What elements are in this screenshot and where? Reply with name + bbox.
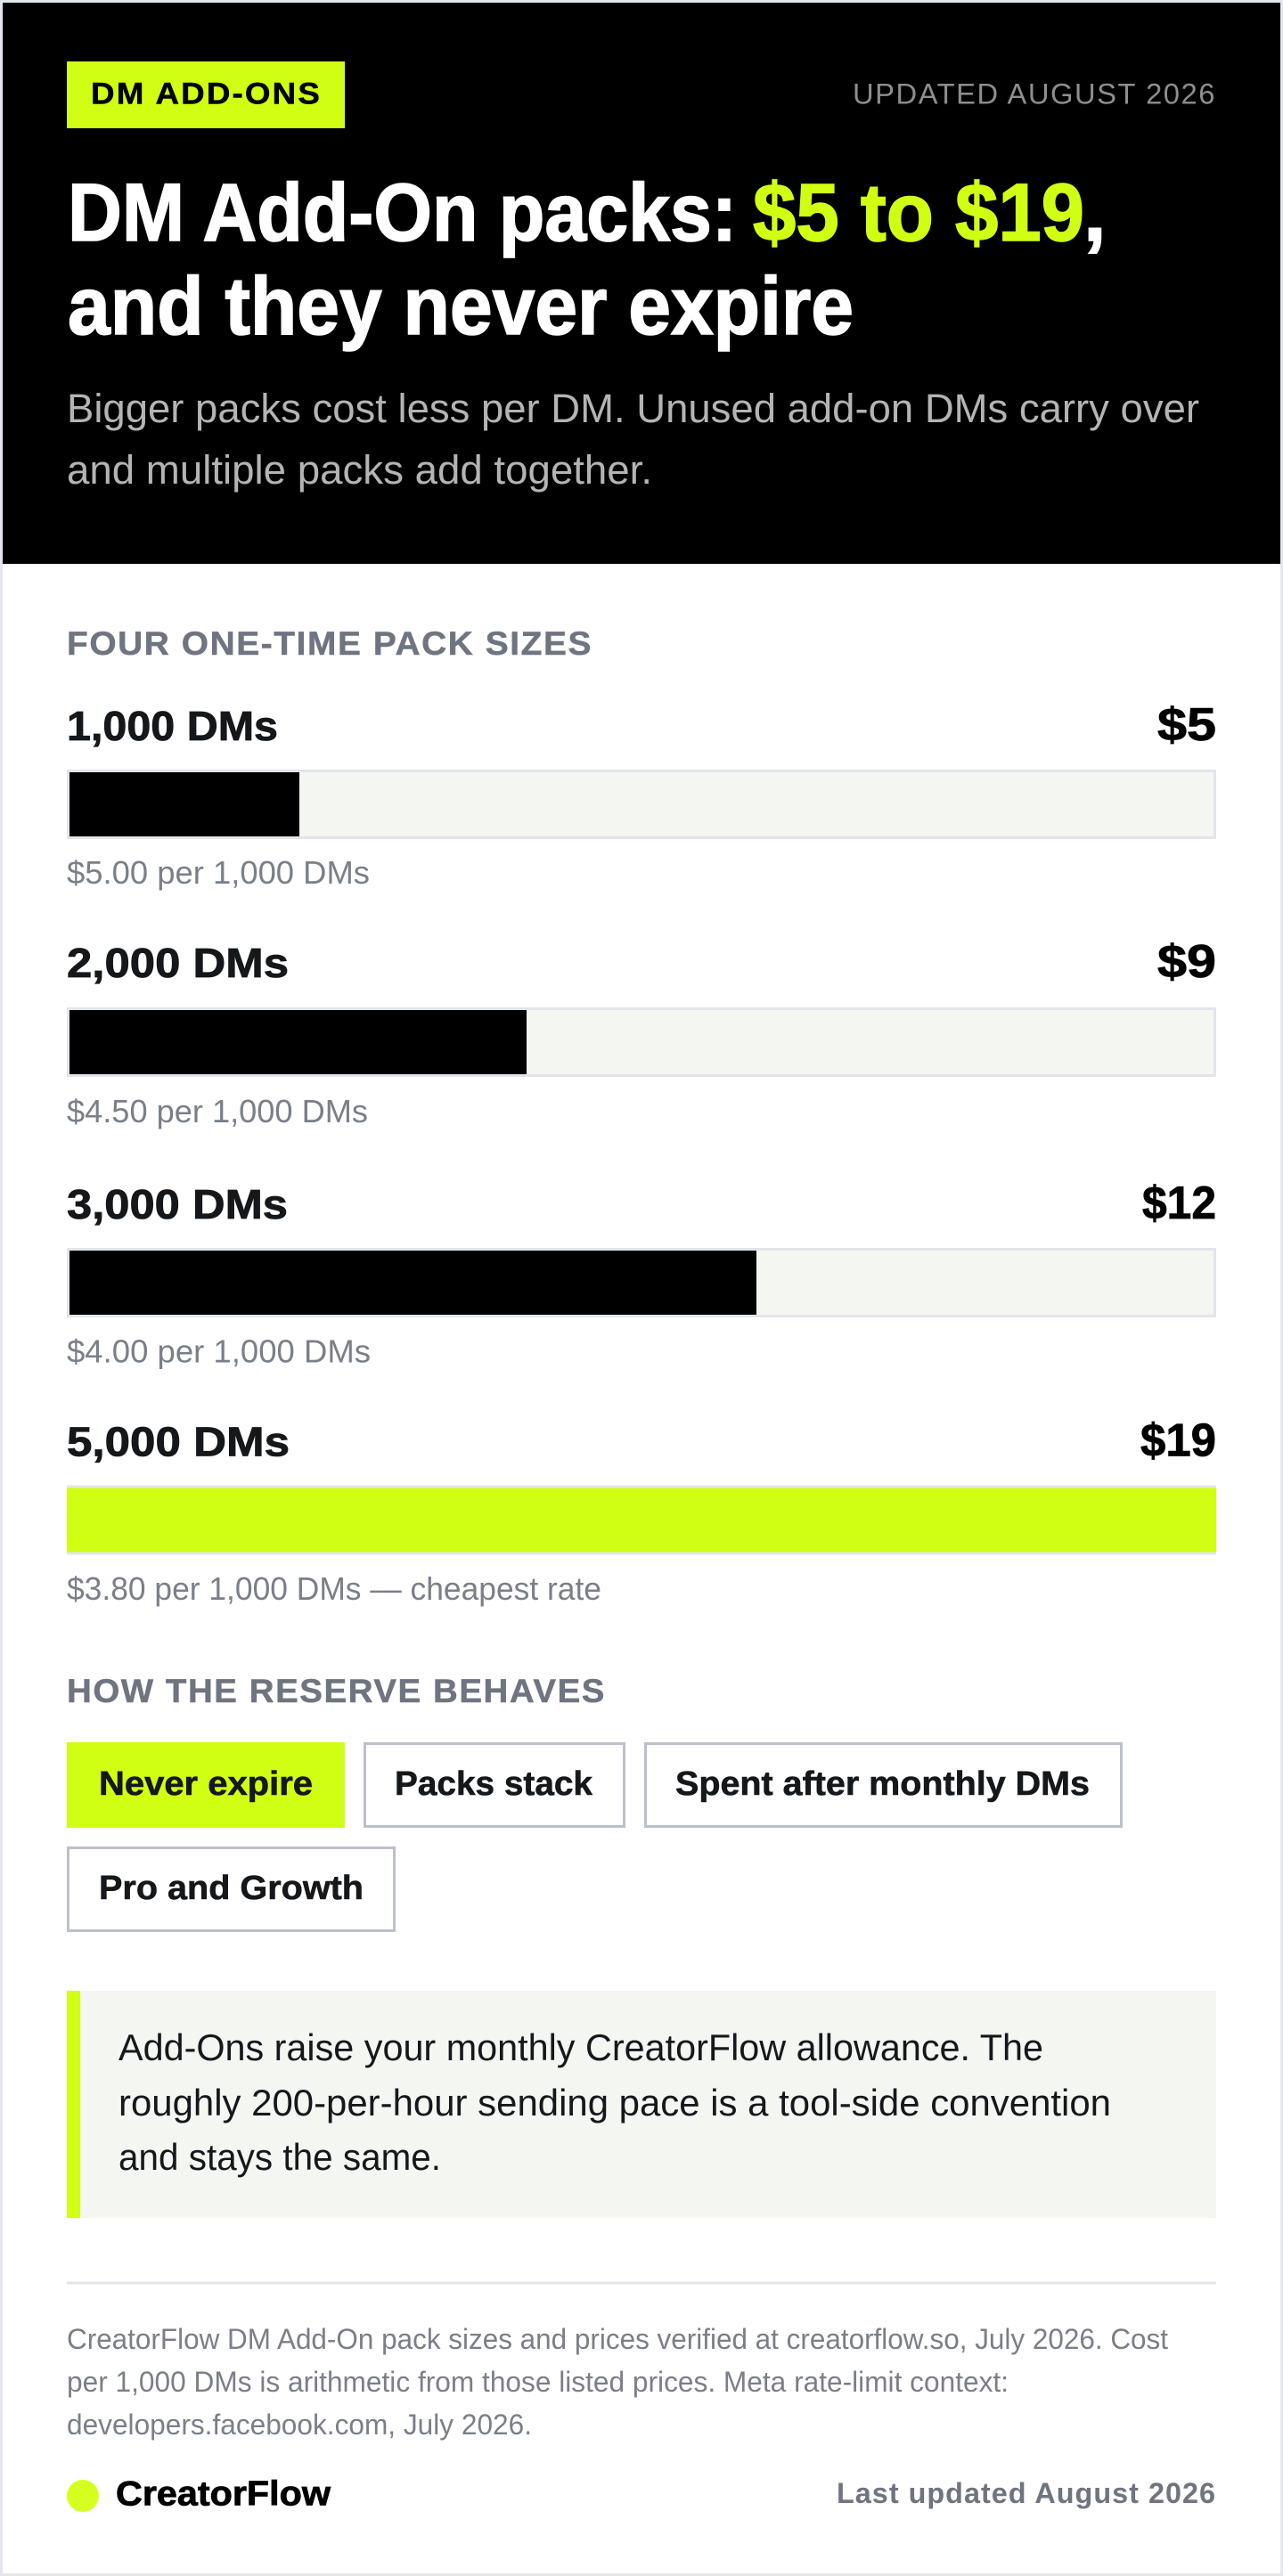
title: and they never expire (68, 261, 854, 352)
sources note: CreatorFlow DM Add-On pack sizes and prices verified at creatorflow.so, July 2026. Cost (67, 2323, 1168, 2355)
panel: 2,000 DMs pack: $9 (1157, 936, 1216, 988)
title (68, 167, 1107, 352)
panel: 1,000 DMs pack (67, 699, 1216, 891)
subtitle (67, 386, 1199, 493)
chip: spent after monthly DMs (645, 1744, 1121, 1826)
panel: 3,000 DMs pack: $12 (1142, 1178, 1216, 1229)
updated date: UPDATED AUGUST 2026 (853, 78, 1216, 110)
subtitle: and multiple packs add together. (67, 447, 652, 493)
panel: 1,000 DMs pack: $5 (1157, 699, 1216, 751)
chip: spent after monthly DMs: Spent after monthly DMs (675, 1765, 1090, 1803)
panel: 1,000 DMs pack: 1,000 DMs (67, 703, 278, 749)
subtitle: Bigger packs cost less per DM. Unused add-on DMs carry over (67, 386, 1199, 431)
callout: Add-Ons raise your monthly CreatorFlow allowance. The (118, 2026, 1043, 2068)
panel: 5,000 DMs pack: $3.80 per 1,000 DMs — cheapest rate (67, 1570, 601, 1607)
tag: DM add-ons: DM ADD-ONS (91, 77, 322, 111)
panel: 3,000 DMs pack (67, 1178, 1216, 1370)
sources note: per 1,000 DMs is arithmetic from those listed prices. Meta rate-limit context: (67, 2366, 1009, 2398)
panel: 5,000 DMs pack: $19 (1140, 1414, 1216, 1466)
tag: DM add-ons (67, 61, 345, 128)
sources note: developers.facebook.com, July 2026. (67, 2409, 532, 2441)
chip: packs stack (365, 1744, 624, 1826)
panel: header (3, 3, 1280, 564)
callout (67, 1991, 1216, 2218)
panel: 2,000 DMs pack (67, 936, 1216, 1129)
heading: how the reserve behaves: HOW THE RESERVE BEHAVES (67, 1673, 606, 1709)
title: $5 to $19 (753, 167, 1084, 258)
sources note (67, 2323, 1168, 2441)
panel: 1,000 DMs pack: $5.00 per 1,000 DMs (67, 854, 370, 891)
callout: and stays the same. (118, 2136, 441, 2178)
callout: roughly 200-per-hour sending pace is a tool-side convention (118, 2082, 1111, 2124)
chip: never expire (67, 1742, 345, 1828)
title: , (1083, 167, 1107, 258)
panel: 3,000 DMs pack: 3,000 DMs (67, 1181, 288, 1227)
panel: 3,000 DMs pack: $4.00 per 1,000 DMs (67, 1333, 371, 1370)
panel: 5,000 DMs pack (67, 1414, 1216, 1607)
brand: CreatorFlow: CreatorFlow (116, 2474, 331, 2514)
chip: pro and growth (68, 1847, 394, 1931)
heading: four one-time pack sizes: FOUR ONE-TIME PACK SIZES (67, 625, 592, 662)
title: DM Add-On packs: (68, 167, 737, 258)
panel: 5,000 DMs pack: 5,000 DMs (67, 1418, 290, 1464)
panel: 2,000 DMs pack: 2,000 DMs (67, 940, 289, 986)
last updated: Last updated August 2026 (837, 2477, 1216, 2509)
chips (67, 1742, 1121, 1931)
chip: never expire: Never expire (99, 1765, 313, 1803)
chip: pro and growth: Pro and Growth (99, 1870, 364, 1907)
chip: packs stack: Packs stack (395, 1765, 593, 1803)
panel: 2,000 DMs pack: $4.50 per 1,000 DMs (67, 1093, 368, 1129)
